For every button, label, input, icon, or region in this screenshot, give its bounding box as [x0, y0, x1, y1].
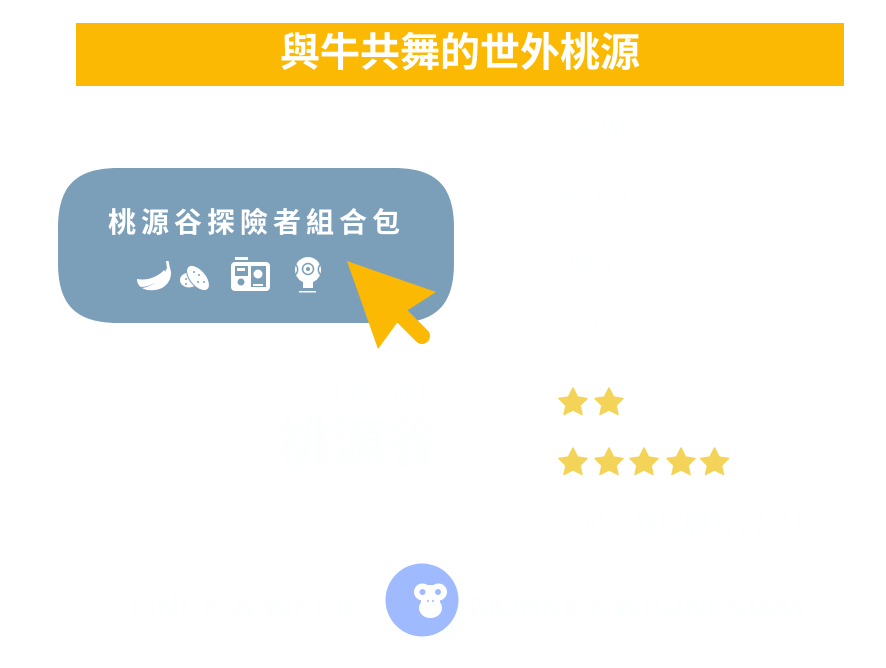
icon: action camera: [231, 257, 270, 291]
panel background: [58, 168, 454, 323]
footnote: 100 %難度體力 評分: [563, 510, 791, 538]
footer left: ONCE A WEEK: [132, 590, 359, 626]
icon: monkey badge: [386, 564, 458, 636]
icon: cookies: [180, 261, 214, 295]
icon: banana: [137, 261, 171, 290]
stat values: [560, 115, 670, 340]
title banner: 與牛共舞的世外桃源: [280, 31, 640, 75]
icon: stars row 2: [559, 448, 728, 474]
panel heading: 桃源谷探險者組合包: [108, 207, 405, 238]
title banner: [76, 23, 844, 86]
stat: duration: 8.5 hrs: [568, 249, 638, 275]
stat: elevation: 620 M: [563, 182, 627, 208]
footer right: MONKEY WEDNESDAY: [470, 590, 810, 623]
stat: distance: 502M: [568, 115, 626, 141]
icon: cursor arrow: [347, 261, 436, 349]
route label: 親子路線: [346, 379, 442, 406]
icon: 360 webcam: [295, 257, 321, 292]
route name: 桃源谷: [278, 415, 440, 475]
icon: stars row 1: [559, 388, 623, 414]
stat: calories: 2280cal: [567, 316, 648, 342]
